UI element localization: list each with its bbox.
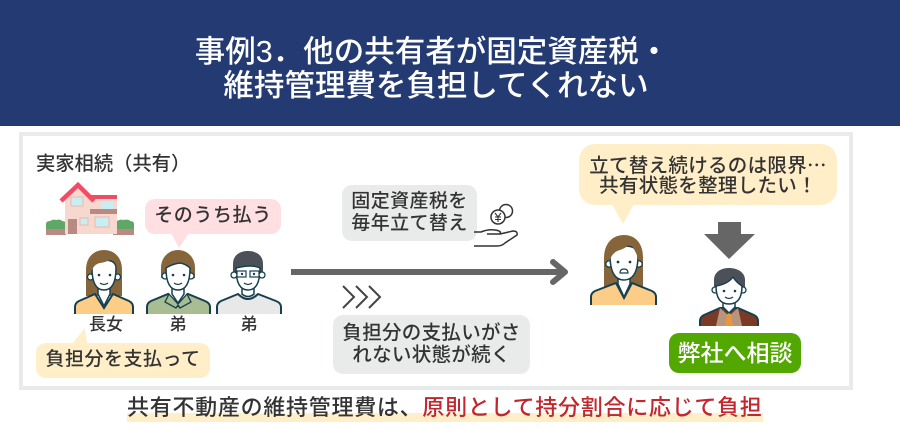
icon: younger brother in green shirt <box>147 250 210 314</box>
bubble: saving for property tax <box>342 185 477 241</box>
bubble: pay eventually: そのうち払う <box>154 205 272 226</box>
icon: younger brother with glasses <box>217 251 281 314</box>
icon: eldest daughter <box>75 250 133 314</box>
arrow: time passes <box>291 262 565 282</box>
button: consult us: 弊社へ相談 <box>678 340 792 366</box>
arrow: down <box>704 222 755 259</box>
label: younger brother 1: 弟 <box>170 315 186 334</box>
icon: chevrons <box>343 286 380 308</box>
bubble: pay eventually <box>145 199 281 248</box>
bubble: reached the limit: 共有状態を整理したい！ <box>599 175 817 197</box>
header band <box>0 0 900 126</box>
title <box>195 35 669 103</box>
title: 維持管理費を負担してくれない <box>223 69 649 103</box>
bubble: unpaid state continues <box>333 315 530 374</box>
heading: family home co-owned: 実家相続（共有） <box>36 154 190 175</box>
bubble: saving for property tax: 固定資産税を <box>351 191 468 212</box>
bubble: unpaid state continues: れない状態が続く <box>352 344 511 366</box>
icon: consultant <box>700 268 758 326</box>
icon: hand with yen coins <box>474 204 517 246</box>
button: consult us <box>669 333 801 373</box>
bubble: unpaid state continues: 負担分の支払いがさ <box>342 322 521 344</box>
bubble: reached the limit: 立て替え続けるのは限界… <box>589 149 827 178</box>
panel: case diagram <box>19 132 853 390</box>
label: younger brother 2: 弟 <box>240 315 258 334</box>
conclusion: 共有不動産の維持管理費は、原則として持分割合に応じて負担 <box>127 395 763 420</box>
label: eldest daughter: 長女 <box>89 315 123 334</box>
bubble: saving for property tax: 毎年立て替え <box>351 213 468 234</box>
icon: worried daughter <box>591 235 656 305</box>
bubble: bearing the cost <box>36 328 210 378</box>
title: 事例3．他の共有者が固定資産税・ <box>195 35 669 69</box>
icon: house <box>46 185 134 235</box>
bubble: reached the limit <box>579 144 837 224</box>
bubble: bearing the cost: 負担分を支払って <box>45 349 201 370</box>
